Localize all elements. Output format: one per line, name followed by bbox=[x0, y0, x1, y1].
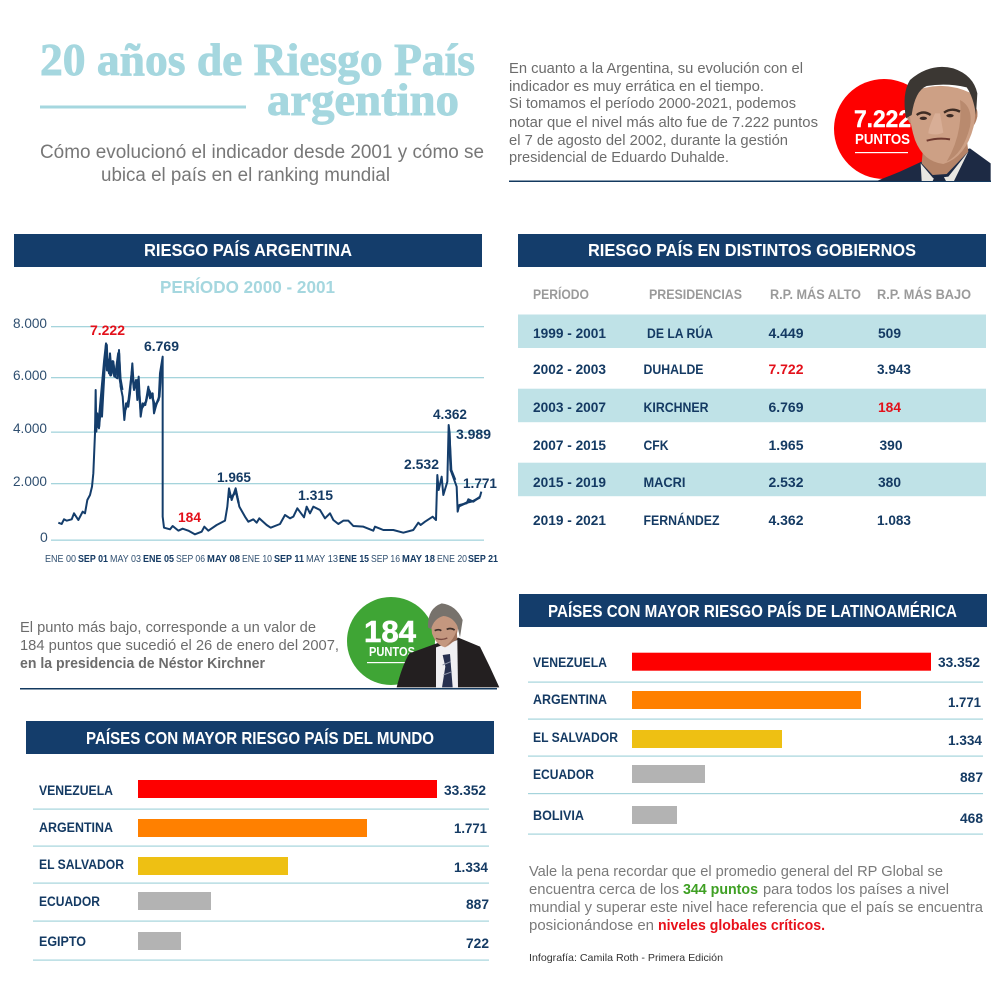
heading: riesgo país argentina: RIESGO PAÍS ARGENTINA bbox=[144, 239, 352, 260]
table: 6.769 bbox=[768, 400, 804, 415]
table: MACRI bbox=[644, 475, 686, 490]
table: 380 bbox=[878, 475, 901, 490]
text block: evolución argentina bbox=[509, 61, 818, 166]
bar chart: mundo: 33.352 bbox=[444, 783, 486, 798]
text block: evolución argentina: presidencial de Eduardo Duhalde. bbox=[509, 150, 729, 166]
line chart: SEP 06 bbox=[176, 554, 205, 565]
text block: evolución argentina: indicador es muy errática en el tiempo. bbox=[509, 79, 764, 95]
bar chart: mundo: 1.771 bbox=[454, 821, 487, 836]
bar chart: latinoamérica: 468 bbox=[960, 811, 983, 826]
subtitle bbox=[40, 142, 484, 186]
line chart: 6.769 bbox=[144, 339, 179, 354]
title: argentino bbox=[267, 75, 459, 125]
bar chart: latinoamérica: 33.352 bbox=[938, 655, 980, 670]
line chart: ENE 05 bbox=[143, 554, 174, 565]
table: DE LA RÚA bbox=[647, 326, 713, 341]
line chart: SEP 16 bbox=[371, 554, 400, 565]
table: PERÍODO bbox=[533, 287, 589, 302]
text block: punto más bajo: 184 puntos que sucedió el 26 de enero del 2007, bbox=[20, 638, 339, 654]
table: 4.449 bbox=[768, 326, 804, 341]
text block: promedio RP global: posicionándose en bbox=[529, 918, 654, 934]
line chart: ENE 00 bbox=[45, 554, 76, 565]
table: 3.943 bbox=[877, 362, 911, 377]
callout: 184 puntos: PUNTOS bbox=[369, 645, 415, 659]
bar chart: latinoamérica: ARGENTINA bbox=[533, 692, 607, 707]
panel: riesgo país en distintos gobiernos bbox=[518, 234, 986, 528]
text block: evolución argentina: En cuanto a la Argentina, su evolución con el bbox=[509, 61, 803, 77]
line chart: SEP 01 bbox=[78, 554, 108, 565]
table: FERNÁNDEZ bbox=[644, 513, 720, 528]
line chart: MAY 03 bbox=[110, 554, 141, 565]
text block: evolución argentina: notar que el nivel más alto fue de 7.222 puntos bbox=[509, 115, 818, 131]
table: 1.965 bbox=[768, 438, 804, 453]
table: R.P. MÁS ALTO bbox=[770, 287, 861, 302]
callout: 184 puntos: 184 bbox=[364, 614, 417, 649]
line chart: SEP 21 bbox=[468, 554, 498, 565]
bar chart: mundo: ARGENTINA bbox=[39, 820, 113, 835]
line chart: 1.771 bbox=[463, 476, 497, 491]
table: 4.362 bbox=[768, 513, 804, 528]
line chart: 1.315 bbox=[298, 488, 333, 503]
bar chart: latinoamérica: ECUADOR bbox=[533, 767, 594, 782]
panel: latinoamérica bbox=[519, 594, 987, 835]
table: 2003 - 2007 bbox=[533, 400, 606, 415]
line chart: 2.000 bbox=[13, 473, 47, 489]
bar chart: latinoamérica: BOLIVIA bbox=[533, 808, 584, 823]
callout: 184 puntos bbox=[347, 597, 435, 685]
bar chart: mundo bbox=[33, 780, 489, 961]
table: CFK bbox=[644, 438, 669, 453]
line chart: 4.362 bbox=[433, 407, 467, 422]
icon: retrato Néstor Kirchner bbox=[397, 603, 499, 687]
bar chart: latinoamérica: 1.334 bbox=[948, 733, 982, 748]
line chart: 6.000 bbox=[13, 367, 47, 383]
table bbox=[518, 287, 986, 528]
line chart bbox=[13, 315, 498, 565]
bar chart: latinoamérica: EL SALVADOR bbox=[533, 730, 618, 745]
bar chart: mundo: ECUADOR bbox=[39, 894, 100, 909]
text block: promedio RP global: Vale la pena recordar que el promedio general del RP Global se bbox=[529, 864, 943, 880]
bar chart: mundo: EL SALVADOR bbox=[39, 857, 124, 872]
text block: promedio RP global: niveles globales críticos. bbox=[658, 918, 825, 934]
table: 2015 - 2019 bbox=[533, 475, 606, 490]
line chart: MAY 08 bbox=[207, 554, 240, 565]
heading: mundo: PAÍSES CON MAYOR RIESGO PAÍS DEL MUNDO bbox=[86, 727, 434, 748]
credit: Infografía: Camila Roth - Primera Edición bbox=[529, 952, 723, 964]
line chart: MAY 13 bbox=[306, 554, 338, 565]
bar chart: mundo: 722 bbox=[466, 936, 489, 951]
heading: mundo bbox=[26, 721, 494, 754]
callout: 7.222 puntos bbox=[834, 79, 934, 179]
line chart: 1.965 bbox=[217, 470, 251, 485]
table: 184 bbox=[878, 400, 901, 415]
table: KIRCHNER bbox=[644, 400, 709, 415]
line chart: 0 bbox=[40, 529, 48, 545]
line chart: 3.989 bbox=[456, 427, 491, 442]
table: 2007 - 2015 bbox=[533, 438, 606, 453]
table: DUHALDE bbox=[644, 362, 704, 377]
callout: 7.222 puntos: PUNTOS bbox=[855, 132, 910, 148]
text block: promedio RP global: 344 puntos bbox=[683, 882, 758, 898]
table: 509 bbox=[878, 326, 901, 341]
table: R.P. MÁS BAJO bbox=[877, 287, 971, 302]
icon: retrato Eduardo Duhalde bbox=[877, 67, 991, 181]
table: 2019 - 2021 bbox=[533, 513, 606, 528]
line chart: ENE 15 bbox=[339, 554, 369, 565]
line chart: MAY 18 bbox=[402, 554, 435, 565]
line chart: 4.000 bbox=[13, 420, 47, 436]
line chart: 184 bbox=[178, 510, 201, 525]
line chart: 8.000 bbox=[13, 315, 47, 331]
line chart: 2.532 bbox=[404, 457, 439, 472]
text block: promedio RP global bbox=[529, 864, 984, 934]
text block: punto más bajo: El punto más bajo, corresponde a un valor de bbox=[20, 620, 316, 636]
callout: 7.222 puntos: 7.222 bbox=[854, 106, 911, 133]
table: PRESIDENCIAS bbox=[649, 287, 742, 302]
heading: riesgo país argentina bbox=[14, 234, 482, 267]
bar chart: mundo: EGIPTO bbox=[39, 934, 86, 949]
text block: evolución argentina: Si tomamos el período 2000-2021, podemos bbox=[509, 96, 796, 112]
heading: distintos gobiernos: RIESGO PAÍS EN DISTINTOS GOBIERNOS bbox=[588, 239, 916, 260]
title bbox=[40, 35, 475, 125]
table: 390 bbox=[880, 438, 902, 453]
bar chart: mundo: VENEZUELA bbox=[39, 783, 113, 798]
subtitle: Cómo evolucionó el indicador desde 2001 y cómo se bbox=[40, 142, 484, 163]
heading: latinoamérica bbox=[519, 594, 987, 627]
table: 2002 - 2003 bbox=[533, 362, 606, 377]
panel: mundo bbox=[26, 721, 494, 961]
line chart: ENE 20 bbox=[437, 554, 467, 565]
title: 20 años de Riesgo País bbox=[40, 35, 475, 85]
bar chart: latinoamérica bbox=[528, 653, 983, 835]
line chart: SEP 11 bbox=[274, 554, 304, 565]
line chart: ENE 10 bbox=[242, 554, 272, 565]
bar chart: latinoamérica: 887 bbox=[960, 770, 983, 785]
table: 1999 - 2001 bbox=[533, 326, 606, 341]
chart subtitle: PERÍODO 2000 - 2001 bbox=[160, 276, 335, 297]
text block: promedio RP global: encuentra cerca de los bbox=[529, 882, 679, 898]
table: 1.083 bbox=[877, 513, 911, 528]
heading: distintos gobiernos bbox=[518, 234, 986, 267]
text block: promedio RP global: mundial y superar este nivel hace referencia que el país se encuentra bbox=[529, 900, 984, 916]
text block: promedio RP global: para todos los países a nivel bbox=[763, 882, 949, 898]
bar chart: latinoamérica: VENEZUELA bbox=[533, 655, 607, 670]
table: 2.532 bbox=[768, 475, 804, 490]
line chart: 7.222 bbox=[90, 323, 125, 338]
bar chart: mundo: 1.334 bbox=[454, 860, 488, 875]
bar chart: latinoamérica: 1.771 bbox=[948, 695, 981, 710]
table: 7.722 bbox=[768, 362, 804, 377]
subtitle: ubica el país en el ranking mundial bbox=[101, 165, 390, 186]
bar chart: mundo: 887 bbox=[466, 897, 489, 912]
panel: riesgo país argentina bbox=[13, 234, 498, 565]
text block: punto más bajo: en la presidencia de Néstor Kirchner bbox=[20, 656, 265, 672]
text block: evolución argentina: el 7 de agosto del 2002, durante la gestión bbox=[509, 133, 788, 149]
text block: punto más bajo bbox=[20, 620, 339, 672]
